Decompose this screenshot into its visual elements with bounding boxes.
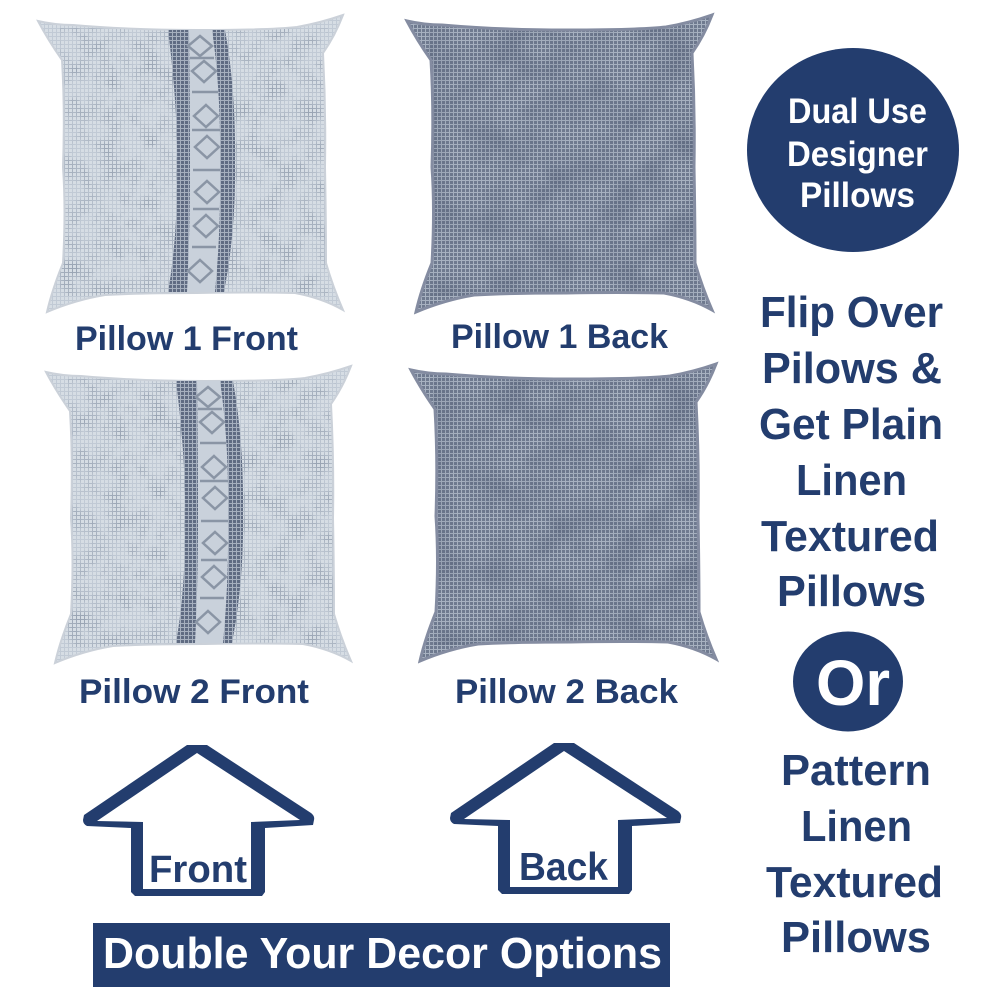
- text: flip over pillows: Flip Over: [760, 288, 943, 337]
- text: flip over pillows: Pilows &: [762, 344, 942, 393]
- text: flip over pillows: Textured: [761, 512, 939, 561]
- arrow: back: [450, 743, 681, 894]
- text: pattern linen textured pillows: Textured: [766, 858, 943, 907]
- label: Pillow 2 Back: Pillow 2 Back: [455, 673, 678, 711]
- text: pattern linen textured pillows: Pillows: [781, 913, 931, 962]
- badge: dual use designer pillows: Designer: [787, 135, 928, 174]
- text: pattern linen textured pillows: Linen: [801, 802, 912, 851]
- text: pattern linen textured pillows: [766, 746, 943, 962]
- label: Pillow 2 Front: Pillow 2 Front: [79, 673, 309, 711]
- pillow 1 back: [407, 15, 712, 312]
- badge: or: Or: [816, 647, 890, 719]
- badge: dual use designer pillows: [747, 48, 959, 252]
- arrow: front: Front: [149, 849, 247, 891]
- badge: dual use designer pillows: Dual Use: [788, 92, 927, 131]
- pillow 1 front: [38, 15, 343, 312]
- label: Pillow 1 Back: Pillow 1 Back: [451, 318, 668, 356]
- text: flip over pillows: [759, 288, 943, 616]
- text: pattern linen textured pillows: Pattern: [781, 746, 931, 795]
- badge: or: [793, 632, 903, 732]
- arrow: front: [83, 745, 314, 896]
- text: flip over pillows: Get Plain: [759, 400, 943, 449]
- banner: double your decor options: Double Your Decor Options: [103, 929, 662, 978]
- pillow 2 front: [46, 366, 351, 663]
- text: flip over pillows: Pillows: [777, 567, 926, 616]
- label: Pillow 1 Front: Pillow 1 Front: [75, 320, 298, 358]
- badge: dual use designer pillows: Pillows: [800, 176, 915, 215]
- text: flip over pillows: Linen: [796, 456, 907, 505]
- arrow: back: Back: [519, 846, 608, 889]
- pillow 2 back: [411, 364, 716, 661]
